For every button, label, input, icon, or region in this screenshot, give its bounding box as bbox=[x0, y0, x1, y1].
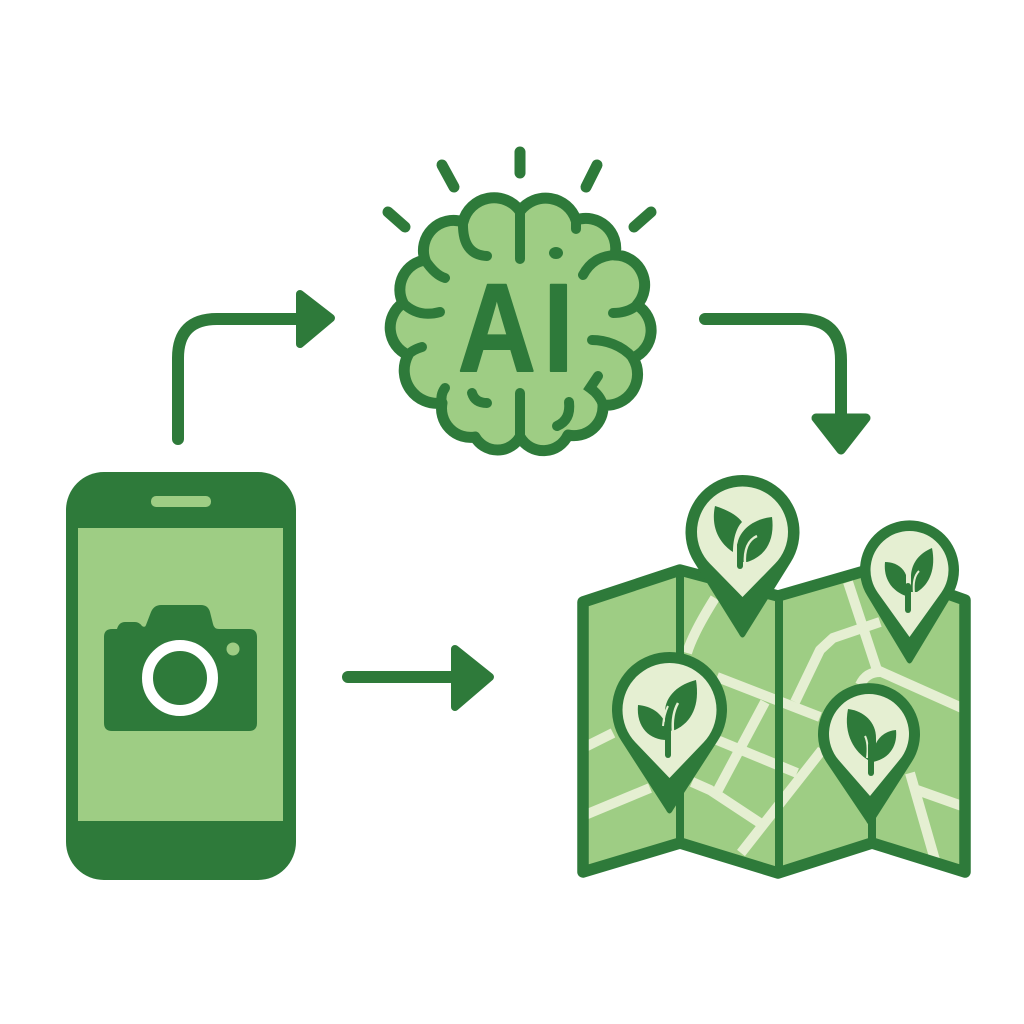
map outline and folds bbox=[583, 568, 965, 873]
icon: sprout bbox=[714, 506, 773, 566]
phone bbox=[66, 472, 296, 880]
icon: sprout bbox=[638, 680, 697, 755]
label: AI: I bbox=[544, 257, 573, 398]
icon: AI brain bbox=[388, 152, 651, 451]
arrow: AI to map bbox=[705, 319, 866, 450]
icon: camera bbox=[104, 605, 257, 731]
arrow: phone to AI bbox=[178, 294, 331, 439]
map roads bbox=[585, 582, 962, 860]
arrow: phone to map bbox=[348, 649, 490, 707]
label: AI: A bbox=[458, 257, 536, 398]
icon: sprout bbox=[847, 709, 896, 773]
icon: sprout bbox=[885, 548, 933, 610]
folded map bbox=[583, 475, 965, 873]
pin: top left bbox=[686, 475, 800, 638]
pin: lower left bbox=[612, 652, 727, 814]
pin: lower right bbox=[818, 683, 920, 825]
pin: top right bbox=[860, 520, 959, 664]
